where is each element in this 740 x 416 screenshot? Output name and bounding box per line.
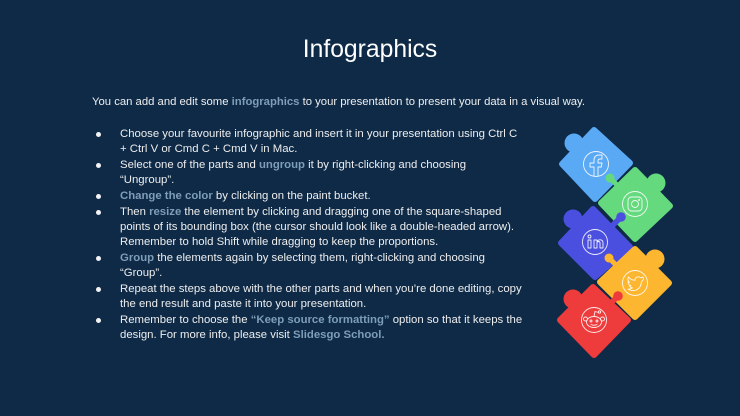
- step: repeat: Repeat the steps above with the other parts and when you’re done editing, copy: [120, 283, 522, 295]
- step: choose: + Ctrl V or Cmd C + Cmd V in Mac.: [120, 143, 297, 155]
- icon: reddit: [582, 308, 606, 332]
- step: choose: [120, 127, 517, 158]
- puzzle piece: blue facebook: [562, 130, 630, 199]
- step: change color: Change the color by clicking on the paint bucket.: [120, 190, 371, 202]
- step: keep source formatting: design. For more info, please visit Slidesgo School.: [120, 329, 385, 341]
- puzzle piece: red reddit: [560, 287, 628, 355]
- step: repeat: [120, 282, 522, 313]
- step: resize: points of its bounding box (the cursor should look like a double-headed arrow).: [120, 221, 514, 233]
- icon: facebook: [584, 152, 608, 176]
- puzzle piece: green instagram: [601, 170, 670, 239]
- step: repeat: the end result and paste it into your presentation.: [120, 298, 366, 310]
- step: keep source formatting: Remember to choose the “Keep source formatting” option so that it keeps the: [120, 314, 522, 326]
- step: group: [120, 251, 485, 282]
- instructions list: [96, 128, 522, 341]
- step: ungroup: “Ungroup”.: [120, 174, 174, 186]
- step: choose: Choose your favourite infographic and insert it in your presentation using Ctrl C: [120, 128, 517, 140]
- puzzle piece: purple linkedin: [561, 209, 630, 277]
- icon: instagram: [622, 192, 648, 216]
- step: resize: Remember to hold Shift while dragging to keep the proportions.: [120, 236, 438, 248]
- intro text: You can add and edit some infographics to your presentation to present your data in a visual way.: [92, 96, 585, 108]
- step: group: “Group”.: [120, 267, 162, 279]
- step: resize: Then resize the element by clicking and dragging one of the square-shaped: [120, 206, 501, 218]
- step: group: Group the elements again by selecting them, right-clicking and choosing: [120, 252, 485, 264]
- icon: linkedin: [582, 230, 608, 254]
- step: ungroup: [120, 158, 466, 189]
- step: keep source formatting: [120, 313, 522, 344]
- step: resize: [120, 204, 514, 251]
- puzzle piece: yellow twitter: [600, 249, 669, 317]
- icon: twitter: [622, 270, 648, 296]
- step: ungroup: Select one of the parts and ungroup it by right-clicking and choosing: [120, 159, 466, 171]
- title: Infographics: [303, 36, 437, 63]
